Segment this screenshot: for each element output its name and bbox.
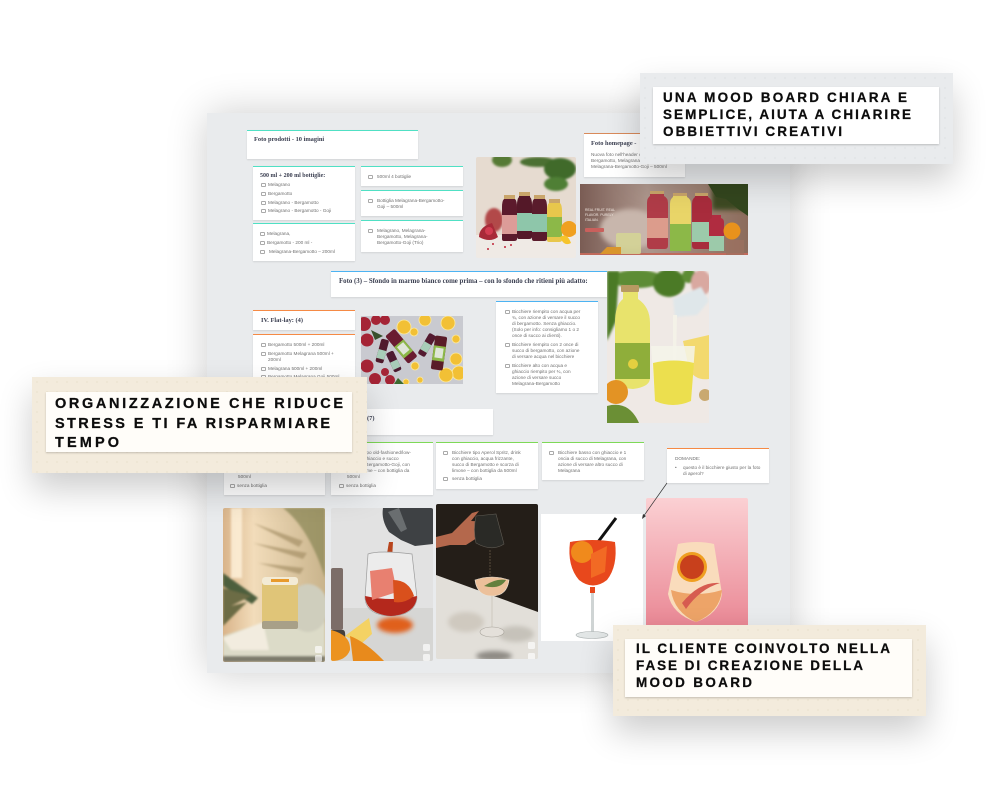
- card: cocktail 2: 500ml: [347, 474, 360, 479]
- callout text panel: ORGANIZZAZIONE CHE RIDUCE: [55, 396, 343, 412]
- card: cocktail 3: con ghiaccio, acqua frizzante,: [452, 456, 514, 461]
- card: domande: DOMANDE:: [675, 456, 700, 461]
- card: cocktail 2: -Bergamotto-Goji, con: [364, 462, 410, 467]
- card: foto prodotti heading: [247, 130, 418, 159]
- card: flat-lay checklist: [253, 334, 355, 386]
- card: cocktail 1: senza bottiglia: [237, 483, 267, 488]
- card: 500 ml + 200 ml bottiglie: 500 ml + 200 ml bottiglie:: [260, 173, 325, 179]
- callout text panel: TEMPO: [55, 435, 119, 451]
- card: 500 ml + 200 ml bottiglie: Melagrano: [268, 182, 290, 187]
- panel: mood board: [207, 113, 790, 673]
- card: 500ml 4 bottiglie: [361, 166, 463, 186]
- photo: homepage banner: [580, 184, 748, 255]
- card: foto 3 heading: [331, 271, 608, 297]
- callout text panel: [46, 392, 352, 452]
- control: expand: [423, 644, 430, 651]
- card: foto homepage: Melagrana-Bergamotto-Goji – 500ml: [591, 164, 667, 169]
- callout: organizzazione: [32, 377, 367, 473]
- card: cocktail 3: Bicchiere tipo Aperol Spritz, drink: [452, 450, 521, 455]
- arrow: domande to cocktail photo: [642, 482, 668, 519]
- callout text panel: [653, 87, 939, 144]
- card: bicchieri checklist: azione di versare succo: [512, 375, 561, 380]
- card: cocktail heading: (7): [367, 415, 374, 422]
- card: bicchieri checklist: di bergamotto. Senza ghiaccio.: [512, 321, 576, 326]
- card: cocktail 1: [224, 442, 325, 495]
- card: cocktail 1: 500ml: [238, 474, 251, 479]
- callout: mood board chiara: [640, 73, 953, 164]
- photo: homepage banner: REAL FRUIT. REAL: [585, 208, 615, 212]
- photo: flat-lay citrus and bottles: [361, 316, 463, 384]
- card: melagrana 200 ml: [253, 223, 355, 261]
- card: cocktail 4: azione di versare altro succo di: [558, 462, 623, 467]
- card: cocktail 4: Bicchiere basso con ghiaccio e 1: [558, 450, 626, 455]
- card: flat-lay checklist: 200ml: [268, 357, 281, 362]
- photo: aperol spritz on white: [541, 514, 643, 641]
- card: bicchieri checklist: ghiaccio riempito per ¾, con: [512, 369, 571, 374]
- control: expand: [315, 646, 322, 653]
- card: trio melagrana: Bergamotto, Melagrana-: [377, 234, 428, 239]
- photo: pink cocktail: [646, 498, 748, 625]
- card: trio melagrana: Bergamotto-Goji (Trio): [377, 240, 423, 245]
- card: flat-lay checklist: Melagrana 500ml + 200ml: [268, 366, 322, 371]
- card: 500 ml + 200 ml bottiglie: Bergamotto: [268, 191, 292, 196]
- card: flat-lay checklist: Bergamotto Melagrana Goji 500ml: [268, 374, 339, 379]
- card: bicchieri checklist: Bicchiere riempito con 2 once di: [512, 342, 578, 347]
- card: foto prodotti heading: Foto prodotti - 10 imagini: [254, 136, 324, 143]
- card: flat-lay heading: [253, 310, 355, 330]
- callout text panel: OBBIETTIVI CREATIVI: [663, 124, 842, 139]
- card: melagrana 200 ml: Melagrana-Bergamotto – 200ml: [269, 249, 335, 254]
- card: cocktail 4: [542, 442, 644, 480]
- card: foto homepage: Foto homepage -: [591, 140, 636, 147]
- photo: homepage banner: FLAVOR. PURELY: [585, 213, 614, 217]
- card: domande: questo è il bicchiere giusto per la foto: [683, 465, 760, 470]
- callout text panel: UNA MOOD BOARD CHIARA E: [663, 90, 907, 105]
- card: foto homepage: Bergamotto, Melagrana-: [591, 158, 642, 163]
- card: trio melagrana: Melagrano, Melagrana-: [377, 228, 425, 233]
- card: melagrana 200 ml: Melagrana,: [267, 231, 290, 236]
- card: bicchieri checklist: succo di bergamotto, con azione: [512, 348, 580, 353]
- photo: bergamot bottle and glass: [607, 271, 709, 423]
- card: bottiglia melagrana bergamotto goji: Goji – 500ml: [377, 204, 403, 209]
- card: domande: [667, 448, 769, 483]
- callout text panel: IL CLIENTE COINVOLTO NELLA: [636, 641, 890, 656]
- card: foto homepage: Nuova foto nell'header c: [591, 152, 641, 157]
- card: 500 ml + 200 ml bottiglie: Melagrano - Bergamotto: [268, 200, 319, 205]
- card: bicchieri checklist: ¾, con azione di versare il succo: [512, 315, 580, 320]
- card: flat-lay checklist: Bergamotto 500ml + 200ml: [268, 342, 324, 347]
- card: bicchieri checklist: [496, 301, 598, 393]
- card: foto 3 heading: Foto (3) – Sfondo in marmo bianco come prima – con lo sfondo che ritieni più adatto:: [339, 278, 588, 285]
- callout text panel: SEMPLICE, AIUTA A CHIARIRE: [663, 107, 911, 122]
- card: trio melagrana: [361, 220, 463, 252]
- card: bicchieri checklist: Melagrana-Bergamotto: [512, 381, 560, 386]
- card: domande: di aperol?: [683, 471, 704, 476]
- card: cocktail 2: ghiaccio e succo: [364, 456, 399, 461]
- photo: homepage banner: ITALIAN.: [585, 218, 599, 222]
- control: search: [315, 655, 322, 662]
- card: cocktail 3: senza bottiglia: [452, 476, 482, 481]
- control: search: [528, 653, 535, 660]
- card: bicchieri checklist: di versare acqua nel bicchiere: [512, 354, 574, 359]
- card: bicchieri checklist: Bicchiere alto con acqua e: [512, 363, 567, 368]
- card: melagrana 200 ml: Bergamotto - 200 ml -: [267, 240, 312, 245]
- card: cocktail 3: limone – con bottiglia da 500ml: [452, 468, 517, 473]
- card: foto homepage: [584, 133, 685, 177]
- callout text panel: MOOD BOARD: [636, 675, 752, 690]
- card: bottiglia melagrana bergamotto goji: [361, 190, 463, 216]
- card: bicchieri checklist: once di succo ai clienti).: [512, 333, 562, 338]
- card: 500ml 4 bottiglie: 500ml 4 bottiglie: [377, 174, 411, 179]
- card: domande: •: [675, 465, 677, 470]
- callout text panel: FASE DI CREAZIONE DELLA: [636, 658, 863, 673]
- card: cocktail 3: [436, 442, 538, 489]
- control: expand: [528, 642, 535, 649]
- card: 500 ml + 200 ml bottiglie: [253, 166, 355, 220]
- card: 500 ml + 200 ml bottiglie: Melagrano - Bergamotto - Goji: [268, 208, 331, 213]
- photo: yellow cocktail with palm shadows: [223, 508, 325, 662]
- card: flat-lay checklist: Bergamotto Melagrana 500ml +: [268, 351, 334, 356]
- card: bicchieri checklist: Bicchiere riempito con acqua per: [512, 309, 580, 314]
- card: bottiglia melagrana bergamotto goji: Bottiglia Melagrana-Bergamotto-: [377, 198, 444, 203]
- callout text panel: STRESS E TI FA RISPARMIARE: [55, 416, 330, 432]
- callout: cliente coinvolto: [613, 625, 926, 716]
- card: cocktail 4: Melagrana: [558, 468, 580, 473]
- card: cocktail 4: oncia di succo di Melagrana, con: [558, 456, 626, 461]
- card: flat-lay heading: IV. Flat-lay: (4): [261, 317, 303, 324]
- photo: coupe cocktail on marble: [436, 504, 538, 659]
- card: cocktail 3: succo di Bergamotto e scorza di: [452, 462, 519, 467]
- card: cocktail 2: lime – con bottiglia da: [364, 468, 409, 473]
- callout text panel: [625, 639, 912, 697]
- card: cocktail 2: tipo old-fashioned/low-: [364, 450, 411, 455]
- photo: negroni poured from shaker: [331, 508, 433, 661]
- control: search: [423, 654, 430, 661]
- card: bicchieri checklist: (Solo per info: consigliamo 1 o 2: [512, 327, 579, 332]
- photo: product bottles: [476, 157, 576, 250]
- card: cocktail 2: [331, 442, 433, 495]
- card: cocktail 2: senza bottiglia: [346, 483, 376, 488]
- card: cocktail heading: [224, 409, 493, 435]
